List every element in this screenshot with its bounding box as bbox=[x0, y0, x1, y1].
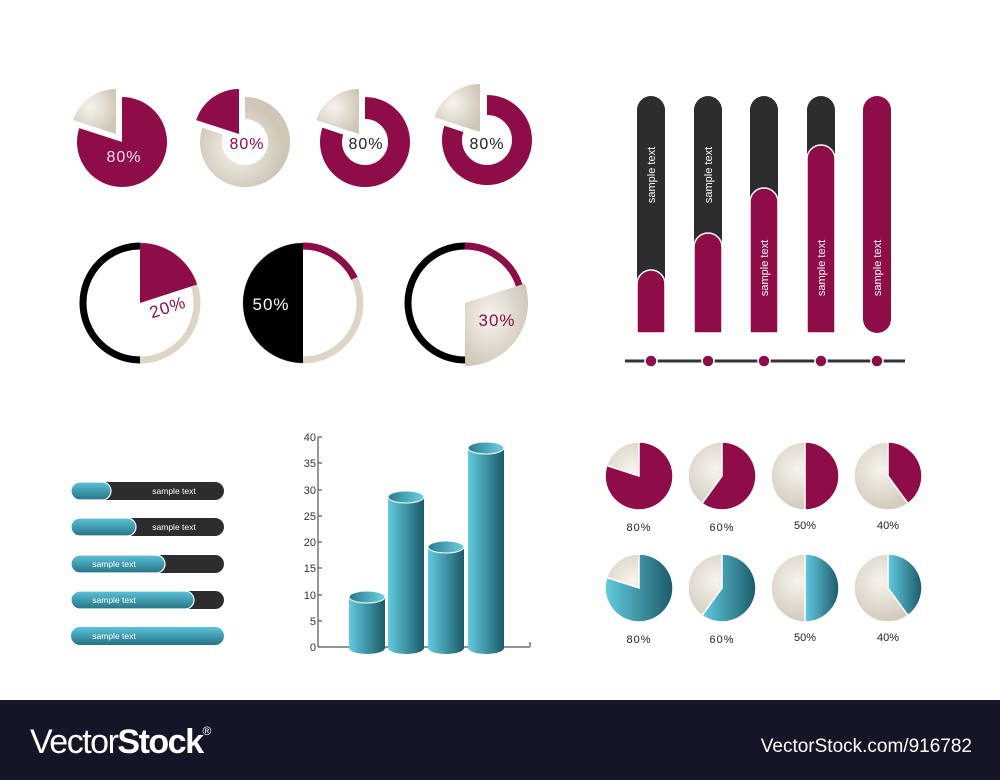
bar 4 bbox=[807, 96, 835, 333]
cylinder 38 bbox=[468, 442, 504, 654]
bar 1: sample text bbox=[646, 147, 658, 203]
pie grid teal row bbox=[605, 554, 922, 622]
bar 3 bbox=[750, 96, 778, 333]
vertical bars panel bbox=[637, 96, 891, 333]
pie grid labels: 80% bbox=[626, 522, 652, 534]
pie grid labels: 80% bbox=[626, 634, 652, 646]
pie grid labels: 60% bbox=[709, 634, 735, 646]
donut 3 top row bbox=[316, 89, 399, 176]
donut 3 top row: 80% bbox=[348, 136, 384, 153]
circle 50%: 50% bbox=[252, 295, 290, 314]
footer: VectorStock.com/916782 bbox=[761, 736, 972, 757]
bar 1 bbox=[637, 96, 665, 333]
horizontal progress bars: sample text bbox=[92, 559, 136, 569]
donut 4 top row bbox=[434, 84, 522, 175]
footer: VectorStock bbox=[30, 723, 202, 761]
horizontal progress bars: sample text bbox=[152, 522, 196, 532]
cylinder 10 bbox=[349, 591, 385, 654]
pie 1 top row bbox=[73, 89, 167, 187]
pie grid labels: 40% bbox=[877, 520, 899, 532]
pie grid labels: 60% bbox=[709, 522, 735, 534]
cylinder bar chart: 25 bbox=[304, 511, 316, 523]
cylinder bar chart: 0 bbox=[310, 642, 316, 654]
donut 2 top row: 80% bbox=[229, 136, 265, 153]
circle 30%: 30% bbox=[478, 311, 516, 330]
bar 2: sample text bbox=[703, 147, 715, 203]
cylinder bar chart: 30 bbox=[304, 485, 316, 497]
pie grid labels: 50% bbox=[794, 632, 816, 644]
donut 4 top row: 80% bbox=[469, 136, 505, 153]
cylinder bar chart: 20 bbox=[304, 537, 316, 549]
timeline bbox=[625, 355, 905, 367]
cylinder bar chart: 5 bbox=[310, 616, 316, 628]
cylinder bar chart bbox=[304, 432, 530, 654]
bar 5: sample text bbox=[872, 240, 884, 296]
cylinder 19 bbox=[428, 541, 464, 654]
pie grid labels: 50% bbox=[794, 520, 816, 532]
footer bbox=[0, 700, 1000, 780]
cylinder 29 bbox=[388, 491, 424, 654]
circle 20% bbox=[83, 243, 197, 360]
bar 2 bbox=[694, 96, 722, 333]
horizontal progress bars: sample text bbox=[92, 631, 136, 641]
cylinder bar chart: 10 bbox=[304, 590, 316, 602]
circle 30% bbox=[408, 246, 528, 366]
circle 50% bbox=[243, 243, 360, 363]
bar 5 bbox=[863, 96, 891, 333]
pie 1 top row: 80% bbox=[106, 149, 142, 166]
footer: ® bbox=[202, 724, 211, 738]
pie grid magenta row bbox=[605, 442, 922, 510]
cylinder bar chart: 35 bbox=[304, 458, 316, 470]
horizontal progress bars: sample text bbox=[152, 486, 196, 496]
donut 2 top row bbox=[196, 89, 279, 176]
bar 3: sample text bbox=[759, 240, 771, 296]
cylinder bar chart: 15 bbox=[304, 563, 316, 575]
horizontal progress bars: sample text bbox=[92, 595, 136, 605]
circle 20%: 20% bbox=[147, 293, 188, 322]
pie grid labels bbox=[626, 520, 899, 646]
cylinder bar chart: 40 bbox=[304, 432, 316, 444]
bar 4: sample text bbox=[816, 240, 828, 296]
pie grid labels: 40% bbox=[877, 632, 899, 644]
horizontal progress bars bbox=[71, 482, 224, 645]
